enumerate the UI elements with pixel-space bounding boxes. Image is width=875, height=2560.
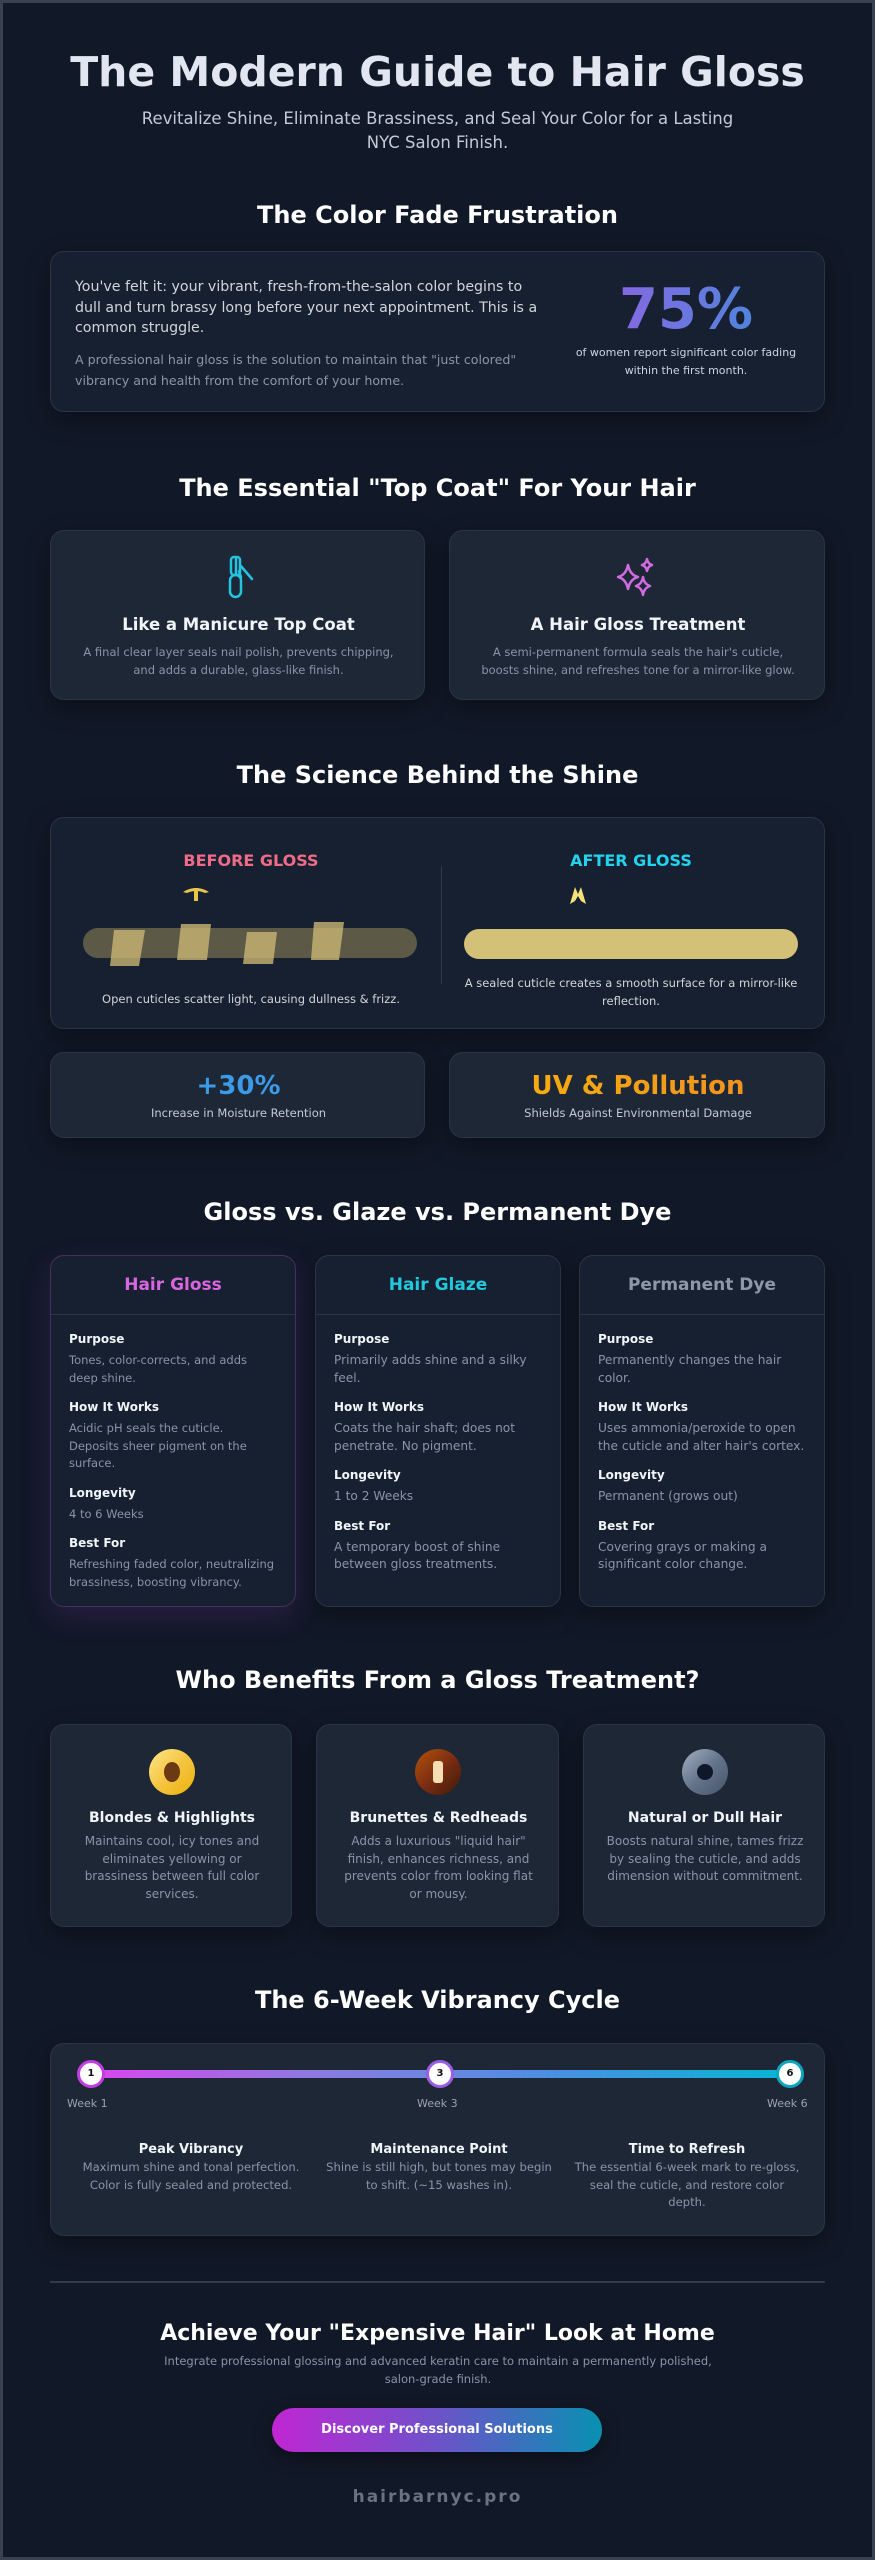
phase: peak: Maximum shine and tonal perfection. Color is fully sealed and protected. [83,2160,299,2192]
marker: week 1: 1 [88,2068,94,2079]
column: permanent dye: Longevity [598,1468,665,1482]
column: hair glaze: A temporary boost of shine between gloss treatments. [334,1540,500,1571]
stat: 75% [576,277,796,377]
label: before: BEFORE GLOSS [183,851,319,870]
column: permanent dye [579,1255,825,1607]
marker: week 6: 6 [787,2068,793,2079]
card title: A Hair Gloss Treatment [531,615,745,634]
column: hair glaze: Purpose [334,1332,389,1346]
phase: maintenance: Shine is still high, but tones may begin to shift. (~15 washes in). [326,2160,552,2192]
card: brunettes [316,1724,559,1927]
title: The Modern Guide to Hair Gloss [70,48,805,96]
button [272,2408,602,2452]
text block: struggle: You've felt it: your vibrant, fresh-from-the-salon color begins to dull and turn brassy long before your next appointment. This is a common struggle. [75,279,537,336]
week labels [67,2097,808,2110]
icon: sparkles [616,558,654,596]
subtitle: Revitalize Shine, Eliminate Brassiness, and Seal Your Color for a Lasting NYC Salon Finish. [142,109,733,152]
stat card: UV: UV & Pollution [532,1071,744,1101]
heading: cycle: The 6-Week Vibrancy Cycle [255,1986,620,2014]
column: hair gloss: How It Works [69,1400,159,1414]
column: hair gloss: Tones, color-corrects, and adds [69,1353,247,1367]
column: hair gloss: 4 to 6 Weeks [69,1506,144,1520]
card: natural [583,1724,825,1927]
CTA text: Integrate professional glossing and advanced keratin care to maintain a permanently polished, salon-grade finish. [164,2354,712,2386]
stat: 75%: of women report significant color fading within the first month. [576,346,796,377]
column: hair glaze: Hair Glaze [389,1275,487,1295]
card: brunettes: Brunettes & Redheads [350,1810,527,1826]
column: hair glaze: 1 to 2 Weeks [334,1489,413,1503]
divider [441,866,442,984]
heading: science: The Science Behind the Shine [237,761,638,789]
card: blondes: Maintains cool, icy tones and eliminates yellowing or brassiness between full color services. [85,1834,259,1900]
column: hair glaze: Primarily adds shine and a silky feel. [334,1353,527,1384]
week labels: Week 3 [417,2097,458,2110]
column: permanent dye: Purpose [598,1332,653,1346]
week labels: Week 1 [67,2097,108,2110]
phase: refresh: The essential 6-week mark to re-gloss, seal the cuticle, and restore color depth. [575,2160,799,2209]
card: blondes [50,1724,292,1927]
stat card: UV: Shields Against Environmental Damage [524,1106,752,1120]
hair strand: sealed [464,929,798,959]
caption: before: Open cuticles scatter light, causing dullness & frizz. [102,992,400,1006]
column: hair glaze: Longevity [334,1468,401,1482]
stat card: UV [449,1052,825,1138]
column: hair gloss: Longevity [69,1486,136,1500]
stat: 75%: 75% [619,277,753,342]
card: blondes: Blondes & Highlights [89,1810,255,1826]
column: permanent dye: Permanent (grows out) [598,1489,738,1503]
column: hair gloss: Hair Gloss [124,1275,222,1295]
column: hair gloss: Purpose [69,1332,124,1346]
heading: color fade: The Color Fade Frustration [257,201,618,229]
card: natural: Boosts natural shine, tames frizz by sealing the cuticle, and adds dimension without commitment. [607,1834,803,1883]
column: permanent dye: Covering grays or making a significant color change. [598,1540,767,1571]
heading: top coat: The Essential "Top Coat" For Your Hair [179,474,696,502]
button: Discover Professional Solutions [321,2422,553,2437]
icon: blonde [149,1749,195,1795]
phase: maintenance [326,2142,552,2192]
CTA heading: Achieve Your "Expensive Hair" Look at Home [160,2321,715,2346]
column: permanent dye: Permanently changes the hair color. [598,1353,781,1384]
column: hair gloss: Best For [69,1536,125,1550]
column: hair glaze: Coats the hair shaft; does not penetrate. No pigment. [334,1421,515,1452]
panel: before/after [50,817,825,1029]
column: hair gloss: Acidic pH seals the cuticle. [69,1421,223,1435]
phase: maintenance: Maintenance Point [370,2142,508,2157]
hair strand: damaged [83,922,417,966]
marker: week 3 [426,2060,454,2088]
column: hair glaze: Best For [334,1518,390,1532]
heading: who benefits: Who Benefits From a Gloss Treatment? [176,1666,699,1694]
icon: scattered light [183,888,209,901]
card: natural: Natural or Dull Hair [628,1810,782,1826]
column: permanent dye: Permanent Dye [628,1275,776,1295]
week labels: Week 6 [767,2097,808,2110]
column: hair glaze [315,1255,561,1607]
heading: comparison: Gloss vs. Glaze vs. Permanent Dye [204,1198,671,1226]
column: permanent dye: How It Works [598,1400,688,1414]
timeline track [89,2070,789,2078]
phase: peak: Peak Vibrancy [139,2142,243,2157]
card: brunettes: Adds a luxurious "liquid hair" finish, enhances richness, and prevents color from looking flat or mousy. [344,1834,533,1900]
column: permanent dye: Uses ammonia/peroxide to open the cuticle and alter hair's cortex. [598,1421,804,1452]
footer brand: hairbarnyc.pro [353,2487,522,2507]
stat card: moisture: +30% [196,1071,281,1101]
stat card: moisture: Increase in Moisture Retention [151,1106,326,1120]
column: hair gloss: Refreshing faded color, neutralizing brassiness, boosting vibrancy. [69,1557,274,1588]
column: hair gloss: deep shine. [69,1370,136,1384]
label: after: AFTER GLOSS [570,851,692,870]
panel: manicure [50,530,425,700]
caption: after: A sealed cuticle creates a smooth surface for a mirror-like reflection. [465,976,797,1008]
icon: reflected light [570,887,586,904]
panel: color fade [50,251,825,412]
panel: timeline [50,2043,825,2236]
marker: week 6 [776,2060,804,2088]
icon: natural [682,1749,728,1795]
column: hair gloss [50,1255,296,1607]
icon: nail polish [228,556,254,598]
text block: solution: A professional hair gloss is the solution to maintain that "just colored" vibrancy and health from the comfort of your home. [75,352,516,388]
column: hair gloss: Deposits sheer pigment on the surface. [69,1438,247,1470]
icon: brunette [415,1749,461,1795]
marker: week 3: 3 [437,2068,443,2079]
stat card: moisture [50,1052,425,1138]
card text: A semi-permanent formula seals the hair's cuticle, boosts shine, and refreshes tone for a mirror-like glow. [481,645,795,676]
panel: gloss treatment [449,530,825,700]
marker: week 1 [77,2060,105,2088]
column: hair glaze: How It Works [334,1400,424,1414]
phase: peak [83,2142,299,2192]
card title: Like a Manicure Top Coat [122,615,355,634]
column: permanent dye: Best For [598,1518,654,1532]
phase: refresh: Time to Refresh [629,2142,745,2157]
card text: A final clear layer seals nail polish, prevents chipping, and adds a durable, glass-like finish. [83,645,394,676]
